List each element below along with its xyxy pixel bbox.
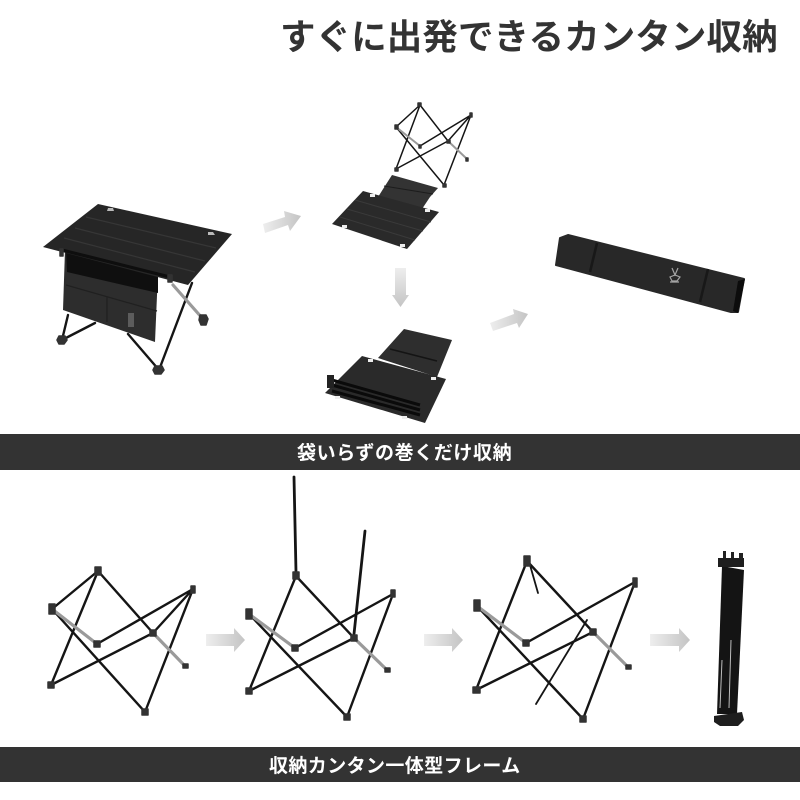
side pocket with logo bbox=[63, 250, 158, 342]
table top bbox=[43, 204, 232, 285]
arrow 2 bbox=[490, 309, 528, 331]
rolled-up step sheet with folded frame bbox=[325, 329, 452, 423]
band: integrated frame caption: 収納カンタン一体型フレーム bbox=[269, 755, 521, 777]
arrow 1 bbox=[263, 211, 301, 233]
rolled table bundle with logo bbox=[556, 235, 745, 313]
arrow 5 bbox=[650, 628, 690, 652]
arrow 3 bbox=[206, 628, 245, 652]
frame step 4: fully folded bbox=[714, 551, 744, 726]
title: すぐに出発できるカンタン収納 bbox=[280, 17, 778, 57]
flat sheet with flap bbox=[332, 175, 439, 249]
frame step 2: poles inserted bbox=[246, 477, 395, 720]
photo: assembled table with side pocket bbox=[43, 204, 232, 374]
frame step 1: open frame bbox=[48, 567, 195, 715]
band: roll storage caption: 袋いらずの巻くだけ収納 bbox=[297, 442, 512, 464]
table legs bbox=[57, 283, 208, 374]
arrow down bbox=[392, 268, 409, 307]
frame step 3: folding poles bbox=[473, 556, 637, 722]
band: roll storage caption bbox=[0, 434, 800, 470]
arrow 4 bbox=[424, 628, 463, 652]
band: integrated frame caption bbox=[0, 747, 800, 782]
frame above flat sheet bbox=[395, 103, 472, 187]
